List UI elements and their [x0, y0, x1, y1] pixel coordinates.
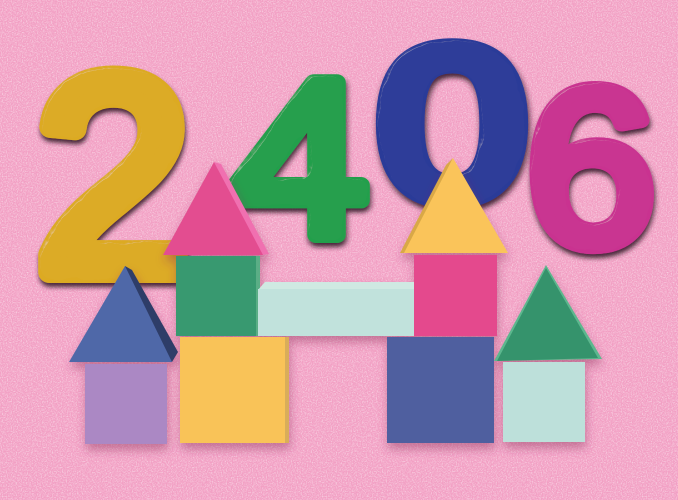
block: mint bar: [258, 282, 414, 336]
roof: blue triangle: [69, 266, 178, 362]
digit: blue 0: 0: [378, 5, 526, 243]
block: yellow square: [180, 337, 289, 443]
block: pink square: [414, 255, 497, 336]
block: green square: [176, 256, 260, 336]
roof: green triangle: [494, 265, 602, 361]
building blocks castle: [69, 158, 602, 444]
digit: yellow 2: 2: [35, 20, 191, 332]
block: lilac square: [85, 364, 167, 444]
roof: pink triangle: [163, 162, 269, 255]
digit: green 4: 4: [230, 34, 368, 282]
block: blue square: [387, 337, 494, 443]
roof: yellow triangle: [400, 158, 508, 253]
clay digits: 2406: [35, 5, 656, 332]
block: mint square: [503, 362, 585, 442]
digit: magenta 6: 6: [526, 44, 656, 292]
